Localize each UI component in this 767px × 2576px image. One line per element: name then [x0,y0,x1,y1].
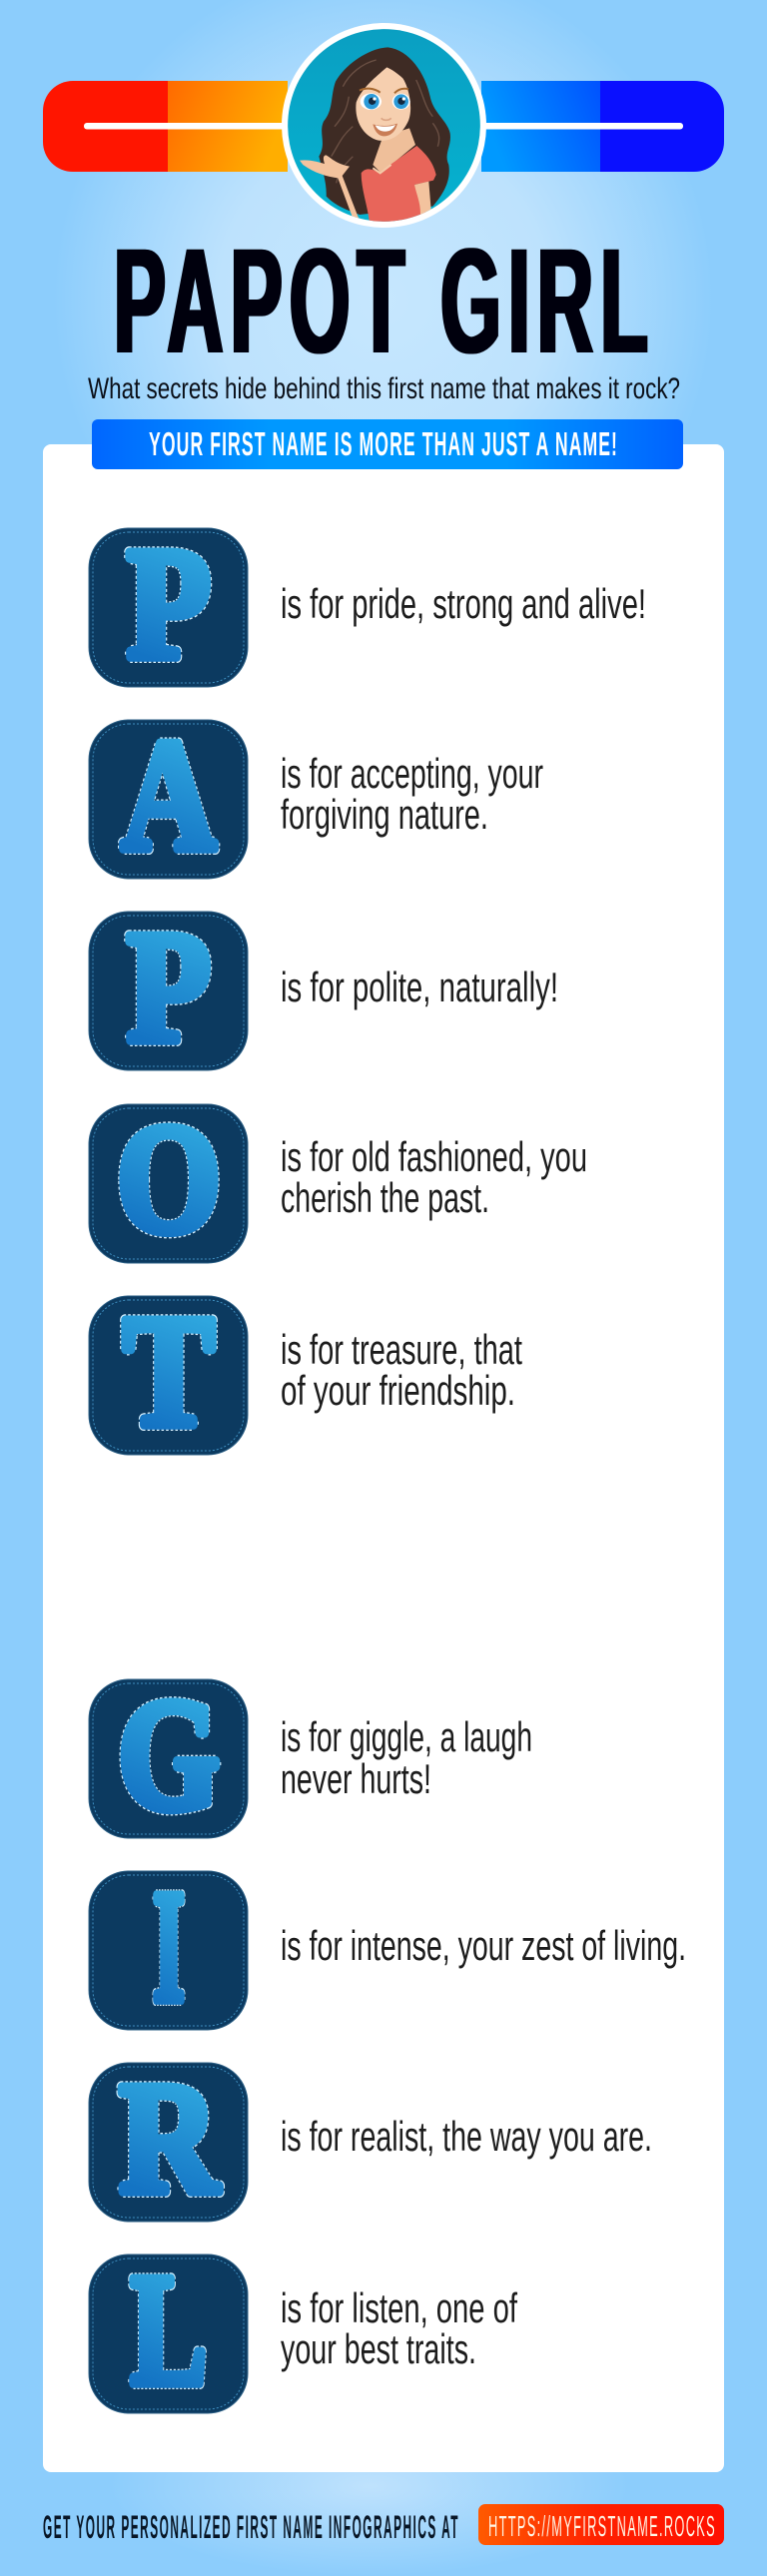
icon: letter P [89,899,248,1075]
icon: letter A [89,707,248,884]
icon: letter G: G [118,1666,220,1843]
icon: letter I: I [153,1857,185,2035]
footer url button [478,2504,724,2545]
banner [92,419,683,469]
text: L lines [281,2284,517,2372]
icon: letter P: P [127,899,211,1075]
icon: letter I: I [153,1857,185,2035]
text: A lines: forgiving nature. [281,791,488,838]
text: O lines [281,1133,587,1221]
text: A lines [281,750,543,838]
icon: letter G: G [118,1666,220,1843]
text: P line: is for polite, naturally! [281,964,558,1010]
text: O lines: is for old fashioned, you [281,1133,587,1180]
text: L lines: is for listen, one of [281,2284,517,2331]
icon: letter L: L [131,2243,207,2419]
text: O lines: cherish the past. [281,1174,489,1221]
icon: letter O [89,1091,248,1265]
icon: letter G [89,1666,248,1843]
white content panel [43,444,724,2472]
text: T lines [281,1326,522,1414]
text: A lines: is for accepting, your [281,750,543,797]
text: L lines: your best traits. [281,2325,476,2372]
icon: letter P [89,515,248,692]
icon: letter T: T [123,1283,215,1460]
icon: letter P: P [127,515,211,692]
icon: letter L: L [131,2243,207,2419]
icon: letter I [89,1857,248,2035]
icon: letter A: A [122,707,216,884]
icon: letter L [89,2243,248,2419]
text: G lines: never hurts! [281,1755,431,1802]
icon: letter R [89,2050,248,2227]
text: G lines [281,1713,532,1802]
icon: letter T: T [123,1283,215,1460]
text: G lines: is for giggle, a laugh [281,1713,532,1760]
icon: letter A: A [122,707,216,884]
header ribbon bar [43,81,724,172]
icon: letter R: R [119,2050,221,2227]
portrait: cartoon girl in white circle [282,23,486,228]
icon: letter T [89,1283,248,1460]
icon: letter P: P [127,899,211,1075]
icon: letter R: R [119,2050,221,2227]
text: T lines: of your friendship. [281,1367,515,1414]
text: T lines: is for treasure, that [281,1326,522,1373]
icon: letter O: O [117,1091,221,1265]
icon: letter O: O [117,1091,221,1265]
icon: letter P: P [127,515,211,692]
